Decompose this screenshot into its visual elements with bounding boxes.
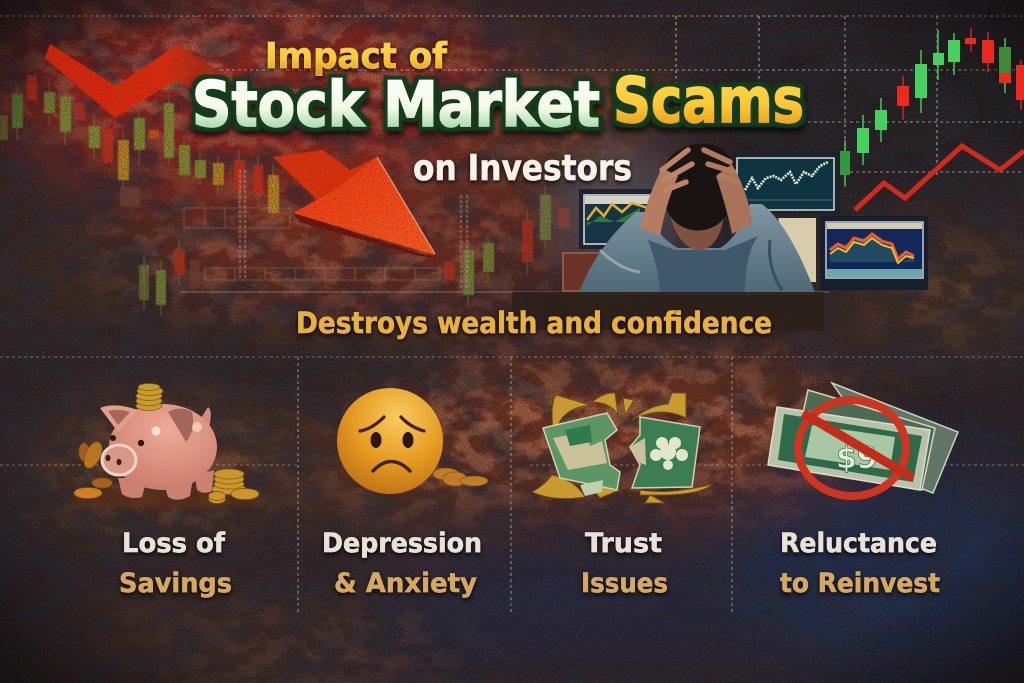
label: Depression: Depression xyxy=(322,528,482,559)
panel: loss of savings xyxy=(70,384,260,599)
icon: torn banknote with gold wrapping xyxy=(532,393,713,503)
icon: banknotes crossed out xyxy=(768,383,958,496)
label: Issues: Issues xyxy=(581,568,668,599)
label: to Reinvest: to Reinvest xyxy=(780,568,940,599)
desk band xyxy=(512,292,824,330)
hair xyxy=(660,144,736,231)
label: Savings: Savings xyxy=(119,568,232,599)
title line: Stock Market: Stock Market xyxy=(192,68,600,141)
icon: red rising line xyxy=(855,146,1024,210)
picture frame xyxy=(563,253,603,291)
right arm and hand xyxy=(716,164,752,234)
title line: Impact of: Impact of xyxy=(265,36,447,77)
panel: depression and anxiety xyxy=(322,388,488,599)
icon: sad face xyxy=(337,388,443,494)
icon: coins xyxy=(74,439,259,504)
title xyxy=(192,36,804,189)
monitor: centre xyxy=(732,152,840,214)
rising candlestick chart xyxy=(840,28,1024,185)
label: Trust: Trust xyxy=(585,528,662,559)
face xyxy=(670,214,724,250)
icon: piggy bank xyxy=(70,384,260,509)
subtitle: Destroys wealth and confidence xyxy=(296,306,772,340)
document behind the man xyxy=(778,218,816,282)
icon: large falling red arrow xyxy=(273,150,435,258)
falling candlestick chart xyxy=(0,75,569,315)
left arm and hand xyxy=(640,168,678,236)
monitor: right xyxy=(820,216,928,290)
label: Reluctance: Reluctance xyxy=(780,528,937,559)
title line: on Investors: on Investors xyxy=(413,148,632,189)
label: & Anxiety: & Anxiety xyxy=(334,568,477,599)
scene: stressed investor at monitors xyxy=(550,144,928,295)
investor figure xyxy=(578,144,816,295)
panel: trust issues xyxy=(532,393,713,599)
icon: zigzag red decline line xyxy=(45,44,245,118)
label: Loss of: Loss of xyxy=(122,528,225,559)
panel: reluctance to reinvest xyxy=(768,383,958,599)
coins on the slot xyxy=(136,384,163,410)
icon: coins under the face xyxy=(433,468,488,486)
icon: banknotes crossed out: $9 xyxy=(836,441,878,476)
monitor: left xyxy=(579,189,655,249)
shirt xyxy=(578,204,816,295)
title line: Scams: Scams xyxy=(613,64,804,137)
